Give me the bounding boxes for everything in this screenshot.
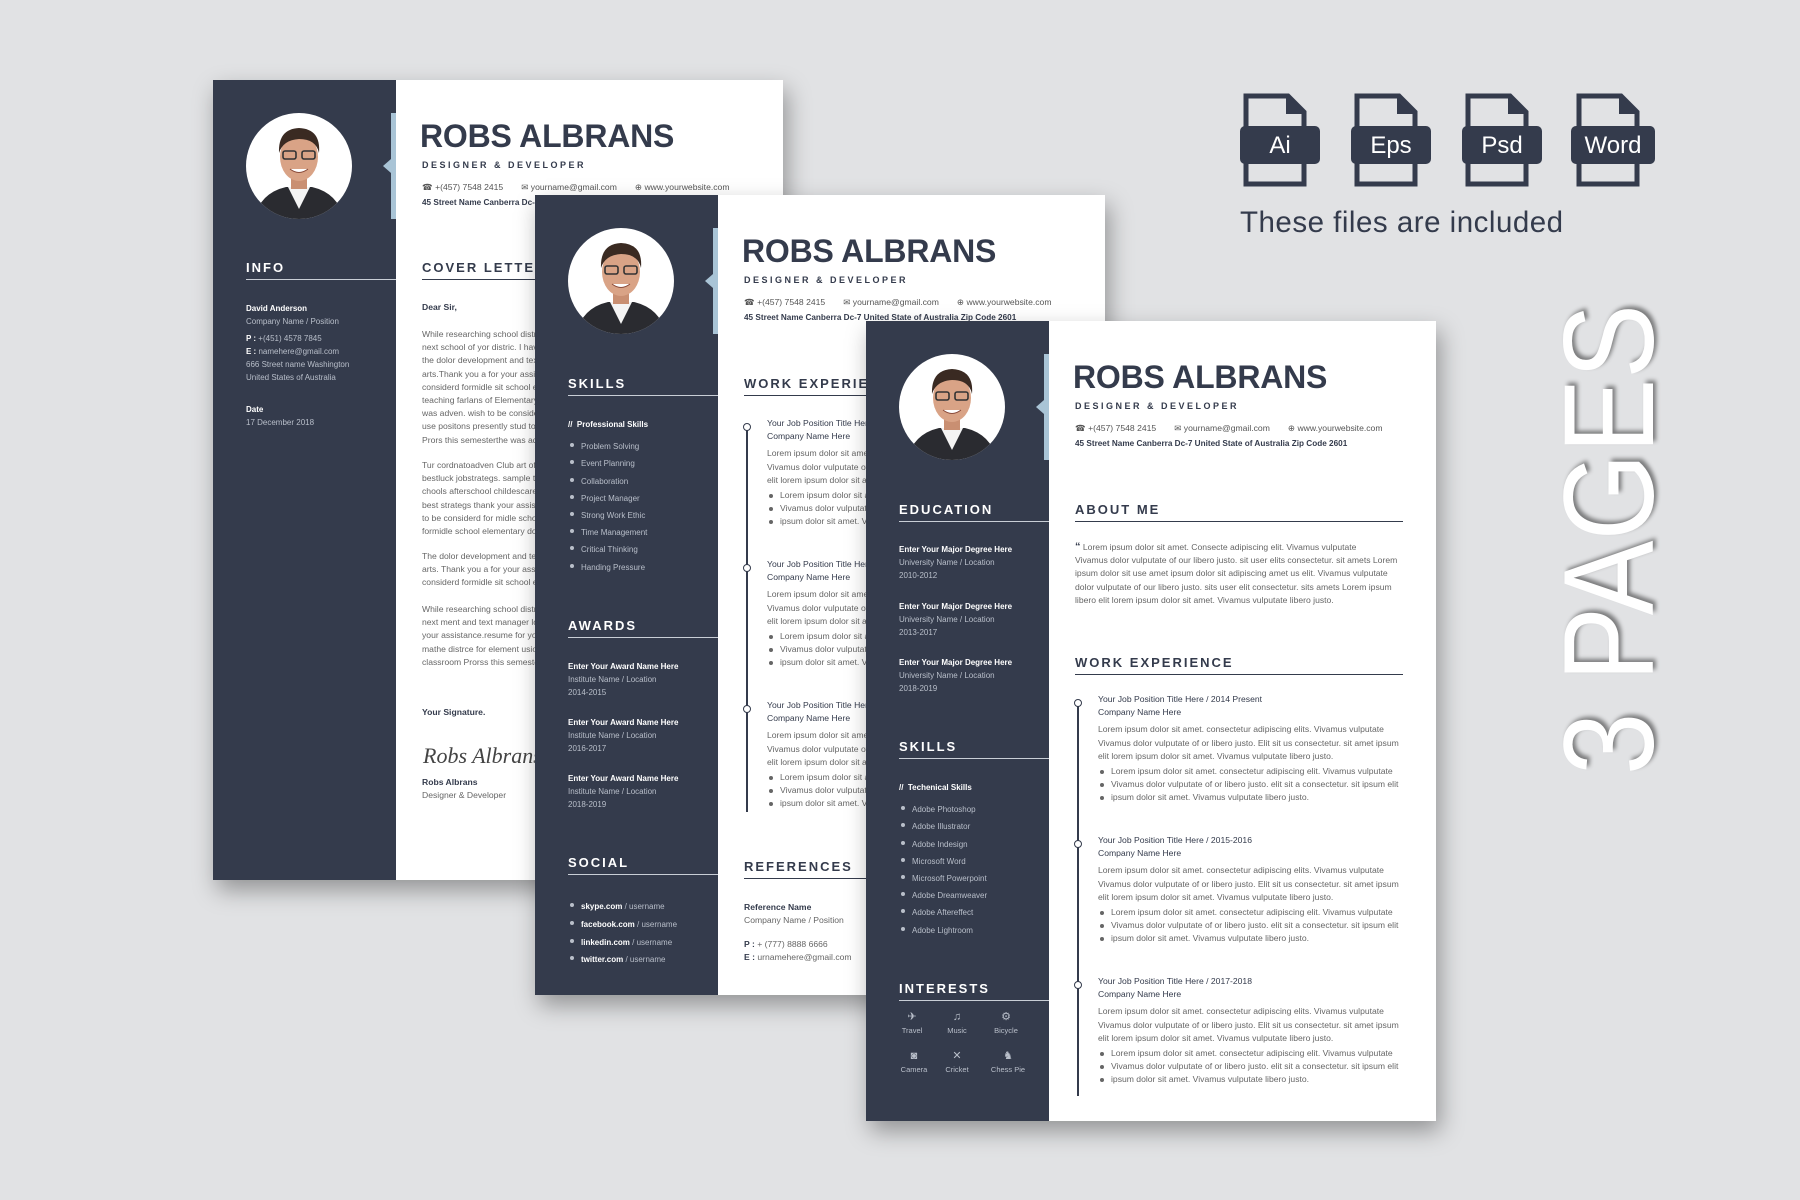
sidebar: ✈	[907, 1011, 917, 1023]
page 1: cover letter: Designer & Developer	[422, 790, 506, 800]
page 3: education / about: ipsum dolor sit amet. Vivamus vulputate libero justo.	[1111, 933, 1309, 943]
page 2: skills / work: Vivamus dolor vulputate of or libero justo. Elit sit us consectetur.	[767, 744, 1010, 754]
page 1: cover letter: mathe distrce for element usion lorem ipsum dolor	[422, 644, 613, 654]
role: DESIGNER & DEVELOPER	[744, 275, 908, 285]
file format icons	[1240, 94, 1655, 186]
heading: skills	[899, 739, 1049, 759]
social list: twitter.com / username	[581, 955, 665, 964]
name: ROBS ALBRANS	[1073, 359, 1327, 395]
skills list: Project Manager	[581, 494, 640, 503]
sidebar: Travel	[902, 1026, 922, 1035]
job entries: elit lorem ipsum dolor sit amet. Vivamus vulputate libero justo.	[767, 475, 1002, 485]
education entries: Enter Your Major Degree Here	[899, 545, 1012, 554]
skills list: // Professional Skills	[568, 420, 648, 429]
icon: Psd: Psd	[1481, 132, 1523, 159]
page 2: skills / work: P : + (777) 8888 6666	[744, 939, 828, 949]
job entries: Your Job Position Title Here / 2014 Present	[767, 418, 931, 428]
heading: info: INFO	[246, 260, 285, 275]
page 2: skills / work	[535, 195, 1105, 995]
page 3: education / about: elit lorem ipsum dolor sit amet. Vivamus vulputate libero justo.	[1098, 892, 1333, 902]
page 1: cover letter: to be considerd for midle school lorem ipsum amet	[422, 513, 614, 523]
icon: Ai: Ai	[1269, 132, 1291, 159]
sidebar: ♞	[1003, 1050, 1013, 1062]
contact info	[246, 334, 349, 382]
sidebar: ♫	[953, 1011, 961, 1023]
job entries: Vivamus dolor vulputate of or libero justo. Elit sit us consectetur.	[767, 462, 1010, 472]
caption: files included: These files are included	[1240, 206, 1564, 239]
awards entries: Institute Name / Location	[568, 675, 656, 684]
heading: skills: SKILLS	[568, 376, 626, 391]
heading: social: SOCIAL	[568, 855, 629, 870]
skills list: Strong Work Ethic	[581, 511, 645, 520]
icon: Psd	[1462, 96, 1542, 184]
sidebar: University Name / Location	[899, 671, 995, 680]
skills list: Event Planning	[581, 459, 635, 468]
page 1: cover letter: formidle school elementary dolor sit amet lorem	[422, 526, 603, 536]
heading: interests: INTERESTS	[899, 981, 990, 996]
page 2: skills / work: elit lorem ipsum dolor sit amet. Vivamus vulputate libero justo.	[767, 616, 1002, 626]
heading: references	[744, 859, 1072, 879]
page 3: education / about: Your Job Position Title Here / 2015-2016	[1098, 835, 1252, 845]
heading: awards: AWARDS	[568, 618, 637, 633]
sidebar: Enter Your Major Degree Here	[899, 658, 1012, 667]
reference entry: Reference Name	[744, 902, 811, 912]
page 2: skills / work: Lorem ipsum dolor sit amet. consectetur adipiscing elit.	[780, 631, 989, 641]
heading: references: REFERENCES	[744, 859, 853, 874]
sidebar: Enter Your Major Degree Here	[899, 602, 1012, 611]
icon: Word: Word	[1585, 132, 1641, 159]
job entries: ipsum dolor sit amet. Vivamus vulputate libero justo.	[1111, 792, 1309, 802]
name: ROBS ALBRANS	[742, 233, 996, 269]
awards entries	[568, 662, 678, 697]
page 1: cover letter: chools afterschool childescare lorem ipsum amet	[422, 486, 608, 496]
heading: education	[899, 502, 1049, 522]
page 1: cover letter: best strategs thank your assistance resume for	[422, 500, 600, 510]
skills list: Collaboration	[581, 477, 628, 486]
signature block: Your Signature.	[422, 707, 485, 717]
sidebar: Chess Pie	[991, 1065, 1025, 1074]
contact line: ☎ +(457) 7548 2415 ✉ yourname@gmail.com ⊕ www.yourwebsite.com	[744, 297, 1051, 307]
contact info: United States of Australia	[246, 373, 336, 382]
skills list	[568, 420, 648, 572]
contact info: 666 Street name Washington	[246, 360, 349, 369]
role: DESIGNER & DEVELOPER	[422, 160, 586, 170]
job entries: Vivamus dolor vulputate of or libero justo. Elit sit us consectetur. sit amet ipsum	[1098, 738, 1399, 748]
page 2: skills / work: E : urnamehere@gmail.com	[744, 952, 852, 962]
sidebar: Institute Name / Location	[568, 787, 656, 796]
about text: “ Lorem ipsum dolor sit amet. Consecte adipiscing elit. Vivamus vulputate	[1075, 541, 1356, 553]
job entries: Lorem ipsum dolor sit amet. consectetur adipiscing elit. Vivamus vulputate	[1111, 766, 1393, 776]
sidebar: Music	[947, 1026, 967, 1035]
about text: Vivamus dolor vulputate of our libero justo. sit user elits consectetur. sit amets Lorem	[1075, 555, 1397, 565]
page 2: skills / work: Lorem ipsum dolor sit amet. consectetur adipiscing elits. Vivamus vulputate	[767, 589, 1053, 599]
page 1: cover letter: Prors this semesterthe was adventure lorem ipsum	[422, 435, 615, 445]
page 1: cover letter: was adven. wish to be considered for middle school	[422, 408, 618, 418]
sidebar: Cricket	[945, 1065, 969, 1074]
page 2: skills / work: Vivamus dolor vulputate of or libero justo.	[780, 785, 937, 795]
info text	[246, 304, 339, 326]
date: 17 December 2018	[246, 418, 314, 427]
technical skills list: Adobe Illustrator	[912, 822, 970, 831]
awards entries: Enter Your Award Name Here	[568, 662, 678, 671]
heading: cover letter: COVER LETTER	[422, 260, 546, 275]
sidebar: ◙	[911, 1050, 917, 1062]
sidebar: Camera	[901, 1065, 927, 1074]
contact line: ☎ +(457) 7548 2415 ✉ yourname@gmail.com ⊕ www.yourwebsite.com	[422, 182, 729, 192]
page 1: cover letter: next ment and text manager loremipsum dolor amet	[422, 617, 619, 627]
heading: work experience: WORK EXPERIENCE	[1075, 655, 1234, 670]
page 3: education / about: Your Job Position Title Here / 2017-2018	[1098, 976, 1252, 986]
sidebar: ⚙	[1001, 1011, 1011, 1023]
page 2: skills / work: ipsum dolor sit amet. Vivamus vulputate libero justo.	[780, 798, 978, 808]
page 3: education / about: Vivamus dolor vulputate of or libero justo. Elit sit us consectetur. sit amet ipsum	[1098, 1020, 1399, 1030]
page 3: education / about: Lorem ipsum dolor sit amet. consectetur adipiscing elits. Vivamus vulputate	[1098, 865, 1384, 875]
page 3: education / about: Vivamus dolor vulputate of or libero justo. Elit sit us consectetur. sit amet ipsum	[1098, 879, 1399, 889]
job entries: Company Name Here	[767, 431, 850, 441]
page 2: skills / work: Vivamus dolor vulputate of or libero justo.	[780, 644, 937, 654]
about text: dolor vulputate of our libero justo. sits user elit consectetur. sits amets Lorem ipsum	[1075, 582, 1392, 592]
page 1: cover letter: classroom Prorss this semester lorem ipsum amet	[422, 657, 613, 667]
info text: Company Name / Position	[246, 317, 339, 326]
sidebar	[866, 321, 1049, 1121]
letter body: Dear Sir,	[422, 302, 457, 312]
page 1: cover letter: next school of yor distric. I have always been intrested	[422, 342, 628, 352]
job entries: Vivamus dolor vulputate of or libero justo. elit sit a consectetur. sit ipsum elit	[1111, 779, 1398, 789]
reference entry	[744, 902, 844, 925]
social list: facebook.com / username	[581, 920, 677, 929]
info text: David Anderson	[246, 304, 307, 313]
job entries: Vivamus dolor vulputate of or libero justo.	[780, 503, 937, 513]
page 3: education / about: Lorem ipsum dolor sit amet. consectetur adipiscing elit. Vivamus vulputate	[1111, 907, 1393, 917]
page 1: cover letter: arts. Thank you a for your assistance resume for you	[422, 564, 622, 574]
sidebar: University Name / Location	[899, 615, 995, 624]
technical skills list: Adobe Aftereffect	[912, 908, 973, 917]
skills list: Handing Pressure	[581, 563, 645, 572]
name: ROBS ALBRANS	[420, 118, 674, 154]
page 1: cover letter: While researching school districts to find the right	[422, 604, 609, 614]
address: 45 Street Name Canberra Dc-7 United State of Australia Zip Code 2601	[744, 313, 1016, 322]
technical skills list: // Techenical Skills	[899, 783, 972, 792]
page 3: education / about: Vivamus dolor vulputate of or libero justo. elit sit a consectetur. sit ipsum elit	[1111, 920, 1398, 930]
skills list: Critical Thinking	[581, 545, 638, 554]
page 3: education / about: Company Name Here	[1098, 848, 1181, 858]
sidebar: 2013-2017	[899, 628, 937, 637]
social list: linkedin.com / username	[581, 938, 672, 947]
page 3: education / about: elit lorem ipsum dolor sit amet. Vivamus vulputate libero justo.	[1098, 1033, 1333, 1043]
sidebar: Bicycle	[994, 1026, 1018, 1035]
page 1: cover letter: bestluck jobstrategs. sample text dolor ipsum sit	[422, 473, 604, 483]
address: 45 Street Name Canberra Dc-7 United State of Australia Zip Code 2601	[422, 198, 694, 207]
page 3: education / about: Lorem ipsum dolor sit amet. consectetur adipiscing elit. Vivamus vulputate	[1111, 1048, 1393, 1058]
heading: work experience	[744, 376, 1072, 396]
page 2: skills / work: Your Job Position Title Here / 2017-2018	[767, 700, 921, 710]
job entries	[1098, 694, 1399, 802]
technical skills list	[899, 783, 988, 935]
heading: awards	[568, 618, 718, 638]
icon: Ai	[1240, 96, 1320, 184]
page 2: skills / work: Vivamus dolor vulputate of or libero justo. Elit sit us consectetur.	[767, 603, 1010, 613]
page 2: skills / work: elit lorem ipsum dolor sit amet. Vivamus vulputate libero justo.	[767, 757, 1002, 767]
contact info: P : +(451) 4578 7845	[246, 334, 322, 343]
technical skills list: Adobe Dreamweaver	[912, 891, 987, 900]
page 1: cover letter: arts.Thank you a for your assistance resume for you	[422, 369, 620, 379]
heading: interests	[899, 981, 1049, 1001]
awards entries: 2014-2015	[568, 688, 606, 697]
skills list: Time Management	[581, 528, 647, 537]
job entries: Company Name Here	[1098, 707, 1181, 717]
page 1: cover letter: use positons presently stud to the middle school	[422, 421, 605, 431]
role: DESIGNER & DEVELOPER	[1075, 401, 1239, 411]
page 1: cover letter	[213, 80, 783, 880]
social list: skype.com / username	[581, 902, 665, 911]
page 3: education / about	[866, 321, 1436, 1121]
page 1: cover letter: your assistance.resume for you considerd formidle	[422, 630, 614, 640]
date	[246, 405, 314, 427]
heading: info	[246, 260, 396, 280]
sidebar: Institute Name / Location	[568, 731, 656, 740]
job entries: Your Job Position Title Here / 2014 Present	[1098, 694, 1262, 704]
page 2: skills / work: Lorem ipsum dolor sit amet. consectetur adipiscing elit.	[780, 772, 989, 782]
heading: cover letter	[422, 260, 750, 280]
technical skills list: Adobe Lightroom	[912, 926, 973, 935]
technical skills list: Microsoft Powerpoint	[912, 874, 987, 883]
page 2: skills / work: ipsum dolor sit amet. Vivamus vulputate libero justo.	[780, 657, 978, 667]
sidebar	[535, 195, 718, 995]
skills list: Problem Solving	[581, 442, 639, 451]
heading: skills	[568, 376, 718, 396]
page 2: skills / work: Company Name Here	[767, 713, 850, 723]
page 2: skills / work: Your Job Position Title Here / 2015-2016	[767, 559, 921, 569]
date: Date	[246, 405, 263, 414]
heading: about me	[1075, 502, 1403, 522]
job entries: elit lorem ipsum dolor sit amet. Vivamus vulputate libero justo.	[1098, 751, 1333, 761]
job entries: ipsum dolor sit amet. Vivamus vulputate libero justo.	[780, 516, 978, 526]
page 1: cover letter: considerd formidle sit school elementary school	[422, 577, 603, 587]
sidebar: 2018-2019	[899, 684, 937, 693]
heading: education: EDUCATION	[899, 502, 993, 517]
contact line: ☎ +(457) 7548 2415 ✉ yourname@gmail.com ⊕ www.yourwebsite.com	[1075, 423, 1382, 433]
icon: Word	[1571, 96, 1655, 184]
education entries: University Name / Location	[899, 558, 995, 567]
page 1: cover letter: While researching school districts to find the right	[422, 329, 609, 339]
heading: work experience	[1075, 655, 1403, 675]
contact info: E : namehere@gmail.com	[246, 347, 339, 356]
job entries: Lorem ipsum dolor sit amet. consectetur adipiscing elits. Vivamus vulputate	[1098, 724, 1384, 734]
page 2: skills / work: Lorem ipsum dolor sit amet. consectetur adipiscing elits. Vivamus vulputate	[767, 730, 1053, 740]
page 3: education / about: Vivamus dolor vulputate of or libero justo. elit sit a consectetur. sit ipsum elit	[1111, 1061, 1398, 1071]
sidebar: Enter Your Award Name Here	[568, 718, 678, 727]
page 1: cover letter: Robs Albrans	[423, 743, 542, 768]
job entries: Lorem ipsum dolor sit amet. consectetur adipiscing elit.	[780, 490, 989, 500]
about text: ipsum dolor sit use amet ipsum dolor sit adipiscing amet us elit. Vivamus vulputate	[1075, 568, 1388, 578]
heading: about me: ABOUT ME	[1075, 502, 1160, 517]
icon: Eps	[1351, 96, 1431, 184]
icon: Eps: Eps	[1370, 132, 1412, 159]
address: 45 Street Name Canberra Dc-7 United State of Australia Zip Code 2601	[1075, 439, 1347, 448]
about text: libero elit lorem ipsum dolor sit amet. Vivamus vulputate libero justo.	[1075, 595, 1334, 605]
technical skills list: Adobe Indesign	[912, 840, 968, 849]
about text	[1075, 541, 1397, 605]
page 1: cover letter: Robs Albrans	[422, 777, 478, 787]
page 1: cover letter: considerd formidle sit school elementary school	[422, 382, 603, 392]
page 1: cover letter: The dolor development and text manager loremipsum	[422, 551, 626, 561]
page 1: cover letter: Tur cordnatoadven Club art of district lorem ipsum	[422, 460, 612, 470]
sidebar: 2018-2019	[568, 800, 606, 809]
social list	[570, 902, 677, 964]
technical skills list: Microsoft Word	[912, 857, 966, 866]
interests icons	[901, 1011, 1025, 1074]
page 2: skills / work: Company Name Here	[767, 572, 850, 582]
sidebar	[213, 80, 396, 880]
page 1: cover letter: teaching farlans of Elementary school districts to	[422, 395, 606, 405]
job entries: Lorem ipsum dolor sit amet. consectetur adipiscing elits. Vivamus vulputate	[767, 448, 1053, 458]
reference entry: Company Name / Position	[744, 915, 844, 925]
photo	[246, 113, 352, 219]
page 3: education / about: Company Name Here	[1098, 989, 1181, 999]
page 3: education / about: Lorem ipsum dolor sit amet. consectetur adipiscing elits. Vivamus vulputate	[1098, 1006, 1384, 1016]
education entries	[899, 545, 1012, 580]
heading: social	[568, 855, 718, 875]
sidebar: Enter Your Award Name Here	[568, 774, 678, 783]
heading: work experience: WORK EXPERIENCE	[744, 376, 903, 391]
photo	[568, 228, 674, 334]
education entries: 2010-2012	[899, 571, 937, 580]
technical skills list: Adobe Photoshop	[912, 805, 976, 814]
sidebar: ✕	[952, 1050, 962, 1062]
page 3: education / about: ipsum dolor sit amet. Vivamus vulputate libero justo.	[1111, 1074, 1309, 1084]
job entries	[767, 418, 1053, 526]
page 1: cover letter: the dolor development and text manager loremipsum	[422, 355, 623, 365]
heading: skills: SKILLS	[899, 739, 957, 754]
photo	[899, 354, 1005, 460]
sidebar: 2016-2017	[568, 744, 606, 753]
